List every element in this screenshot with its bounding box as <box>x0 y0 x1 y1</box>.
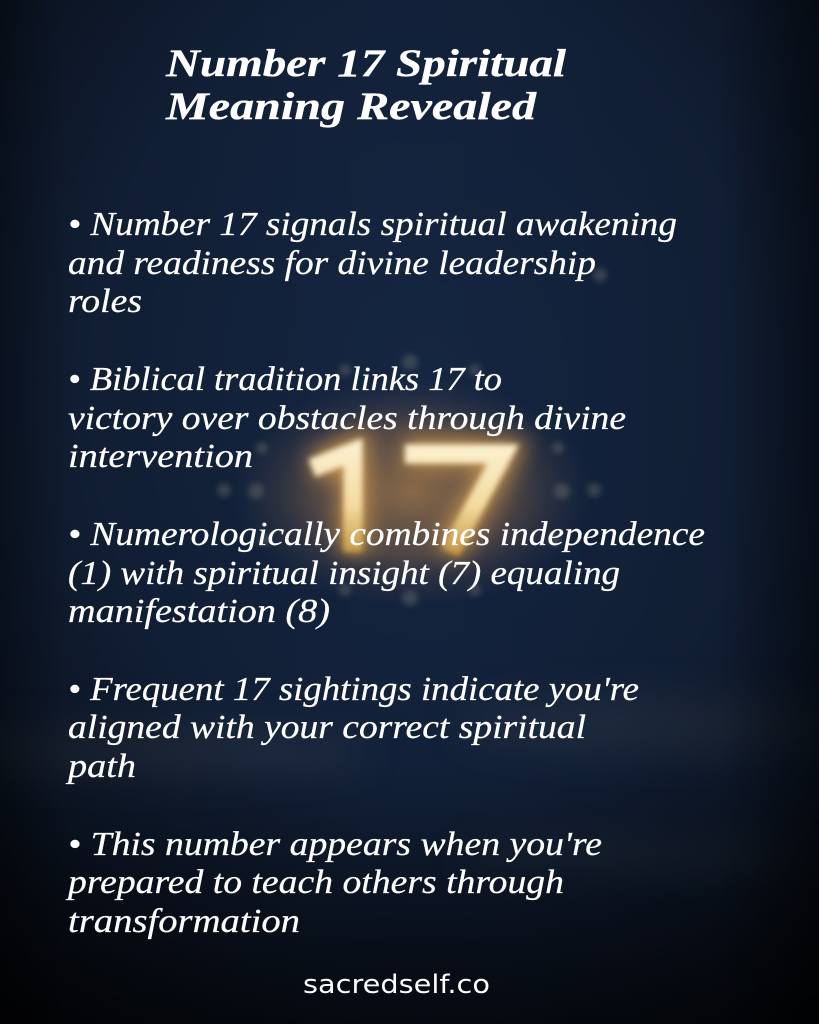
bullet: biblical tradition <box>68 361 626 475</box>
bullet: frequent sightings: aligned with your correct spiritual <box>68 709 586 746</box>
bullet: spiritual awakening: and readiness for divine leadership <box>68 245 596 282</box>
bullet: spiritual awakening <box>68 206 677 320</box>
bullet: frequent sightings <box>66 671 639 785</box>
title <box>165 42 566 128</box>
bullet: biblical tradition: victory over obstacles through divine <box>68 400 626 437</box>
bullet: frequent sightings: path <box>66 748 136 785</box>
title: Number 17 Spiritual <box>165 42 566 85</box>
bullet: spiritual awakening: • Number 17 signals spiritual awakening <box>68 206 677 243</box>
glowing number 17 <box>217 268 607 607</box>
bullet: biblical tradition: intervention <box>68 438 253 475</box>
bullet: numerology: manifestation (8) <box>68 593 330 630</box>
bullet: biblical tradition: • Biblical tradition links 17 to <box>68 361 502 398</box>
footer website: sacredself.co <box>303 970 490 1000</box>
bullet: teaching others: transformation <box>68 903 300 940</box>
bullet: teaching others: prepared to teach others through <box>66 864 564 901</box>
bullet: teaching others <box>66 826 602 940</box>
bullet: frequent sightings: • Frequent 17 sightings indicate you're <box>68 671 639 708</box>
bullet: numerology: (1) with spiritual insight (7) equaling <box>68 555 620 592</box>
bullet: numerology <box>68 516 705 630</box>
title: Meaning Revealed <box>165 85 537 128</box>
bullet: teaching others: • This number appears when you're <box>68 826 602 863</box>
bullet: numerology: • Numerologically combines independence <box>68 516 705 553</box>
bullet: spiritual awakening: roles <box>68 283 142 320</box>
